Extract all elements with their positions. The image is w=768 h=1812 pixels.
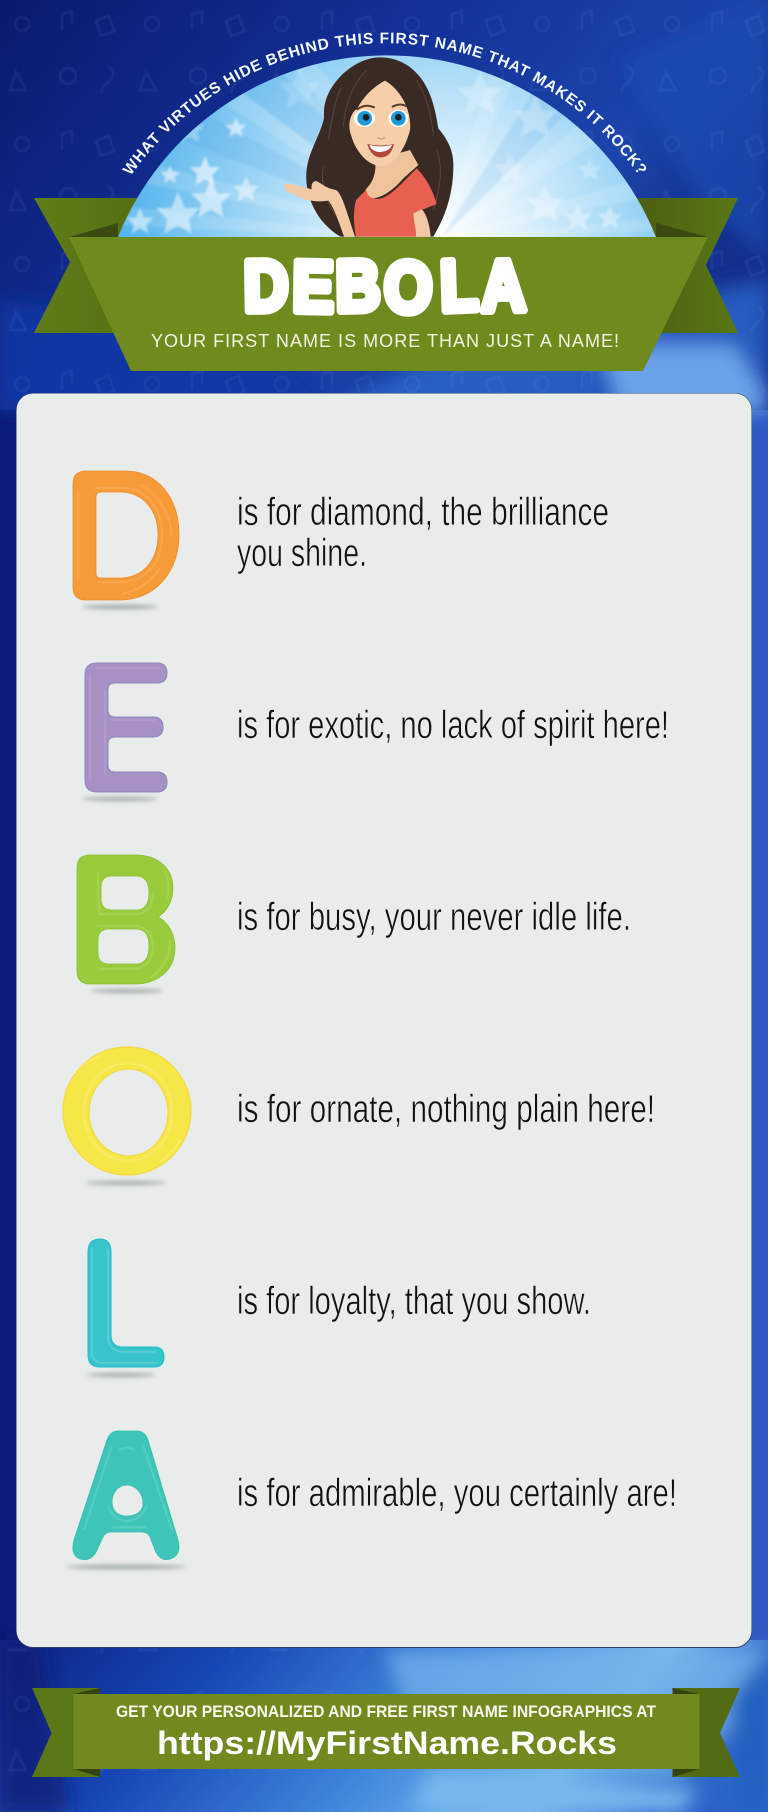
letter O [63, 1047, 191, 1185]
ribbon: back tails [34, 198, 738, 333]
row E [82, 663, 669, 801]
tagline: YOUR FIRST NAME IS MORE THAN JUST A NAME! [151, 331, 619, 351]
footer call to action: GET YOUR PERSONALIZED AND FREE FIRST NAME INFOGRAPHICS AT [116, 1703, 656, 1721]
letter L [87, 1239, 164, 1377]
letter B [77, 855, 175, 993]
neck and chest [365, 150, 418, 199]
footer ribbon [32, 1688, 740, 1777]
row B [77, 855, 631, 993]
panel: virtues card [16, 393, 752, 1648]
text: D line: you shine. [237, 532, 367, 575]
letter A [66, 1431, 186, 1569]
footer url: https://MyFirstName.Rocks [157, 1725, 617, 1761]
footer ribbon tails [32, 1688, 740, 1777]
row O [63, 1047, 655, 1185]
hair [306, 57, 453, 237]
brows [357, 104, 406, 109]
curved heading: WHAT VIRTUES HIDE BEHIND THIS FIRST NAME THAT MAKES IT ROCK? [122, 32, 646, 174]
ribbon: folds [69, 223, 708, 237]
row A [66, 1431, 677, 1569]
eyes [354, 110, 375, 127]
character: woman with brown hair and red top [284, 57, 453, 237]
mouth [367, 144, 394, 157]
red top [354, 168, 437, 237]
arm and hand [284, 181, 355, 237]
ribbon: front [69, 237, 708, 371]
text: D line: is for diamond, the brilliance [237, 491, 609, 534]
face [349, 81, 410, 166]
name title: DEBOLA [243, 245, 526, 329]
letter E [82, 663, 167, 801]
letter D [73, 471, 179, 609]
row L [87, 1239, 591, 1377]
text: B line: is for busy, your never idle life. [237, 896, 631, 939]
text: L line: is for loyalty, that you show. [237, 1280, 591, 1323]
dome with starburst [118, 55, 656, 237]
row D [73, 471, 609, 609]
footer ribbon front [74, 1694, 700, 1769]
